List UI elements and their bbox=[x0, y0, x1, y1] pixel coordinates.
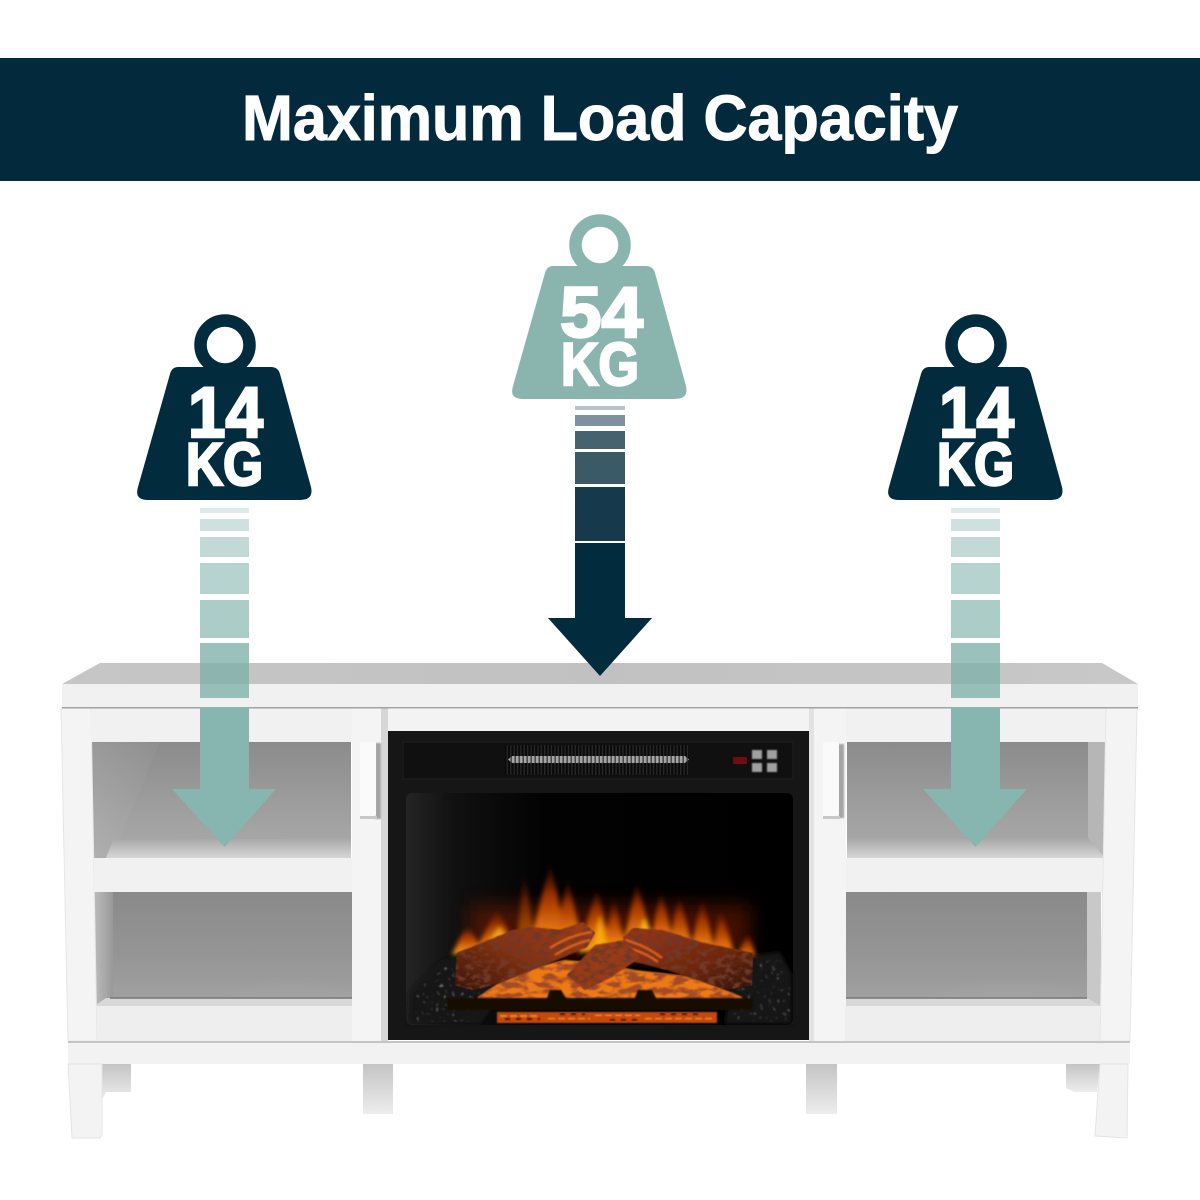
fireplace header panel bbox=[388, 709, 809, 731]
heater vent bbox=[505, 745, 688, 775]
weight unit: KG bbox=[186, 431, 263, 498]
base rail bbox=[68, 1041, 1130, 1064]
fireplace body bbox=[388, 731, 809, 1040]
cabinet top surface bbox=[62, 663, 1138, 684]
weight icon bbox=[137, 320, 312, 500]
weight value: 54 bbox=[560, 274, 644, 353]
TV stand cabinet bbox=[61, 663, 1138, 1138]
weight icon bbox=[888, 320, 1063, 500]
right weight: 14 KG bbox=[888, 320, 1063, 500]
fire grate bbox=[447, 990, 753, 1010]
control buttons bbox=[752, 750, 777, 772]
fading stripe 2 bbox=[575, 415, 625, 426]
left and right coals bbox=[408, 950, 792, 1024]
lower embers bbox=[497, 1012, 717, 1023]
fading stripes bbox=[951, 508, 1000, 698]
arrow shaft and head bbox=[548, 543, 652, 676]
weight unit: KG bbox=[561, 331, 639, 398]
left door handle bbox=[360, 742, 381, 819]
fading stripe 4 bbox=[575, 452, 625, 484]
weight value: 14 bbox=[188, 374, 263, 453]
left door opening upper bbox=[92, 742, 351, 858]
arrow shaft and head bbox=[172, 707, 276, 847]
right log bbox=[623, 928, 753, 990]
front left leg bbox=[68, 1064, 102, 1138]
control panel bbox=[403, 742, 793, 779]
fading stripe 1 bbox=[575, 406, 625, 410]
centre arrow bbox=[548, 406, 652, 676]
weight icon bbox=[512, 220, 687, 399]
left arrow bbox=[172, 508, 276, 847]
weight unit: KG bbox=[937, 431, 1014, 498]
glass window bbox=[406, 793, 793, 1025]
left weight: 14 KG bbox=[137, 320, 312, 500]
front right leg bbox=[1095, 1064, 1128, 1138]
back right leg bbox=[1066, 1064, 1100, 1092]
centre weight: 54 KG bbox=[512, 220, 687, 399]
arrow shaft and head bbox=[923, 707, 1027, 847]
centre log pieces bbox=[567, 940, 640, 990]
right arrow bbox=[923, 508, 1027, 847]
top edge shadow line bbox=[62, 707, 1138, 708]
electric fireplace bbox=[388, 731, 809, 1040]
red display bbox=[733, 757, 747, 764]
fire glow bbox=[470, 905, 750, 955]
centre right leg bbox=[806, 1064, 837, 1114]
back left leg bbox=[97, 1064, 131, 1100]
right door frame bbox=[809, 708, 1137, 1041]
right door opening upper bbox=[847, 742, 1105, 858]
cabinet top front edge bbox=[62, 684, 1138, 707]
centre left leg bbox=[363, 1064, 393, 1114]
glowing embers bbox=[478, 960, 742, 1000]
fading stripes bbox=[200, 508, 249, 698]
title banner bbox=[0, 58, 1200, 181]
heater bar bbox=[508, 756, 689, 763]
fading stripe 3 bbox=[575, 431, 625, 449]
left door frame bbox=[61, 708, 388, 1041]
left door opening lower bbox=[94, 892, 365, 1060]
weight value: 14 bbox=[939, 374, 1014, 453]
flames bbox=[452, 863, 757, 962]
right door opening lower bbox=[845, 892, 1101, 1060]
title: Maximum Load Capacity bbox=[242, 82, 958, 154]
right door handle bbox=[823, 742, 844, 819]
fading stripe 5 bbox=[575, 487, 625, 541]
left log bbox=[455, 922, 595, 990]
